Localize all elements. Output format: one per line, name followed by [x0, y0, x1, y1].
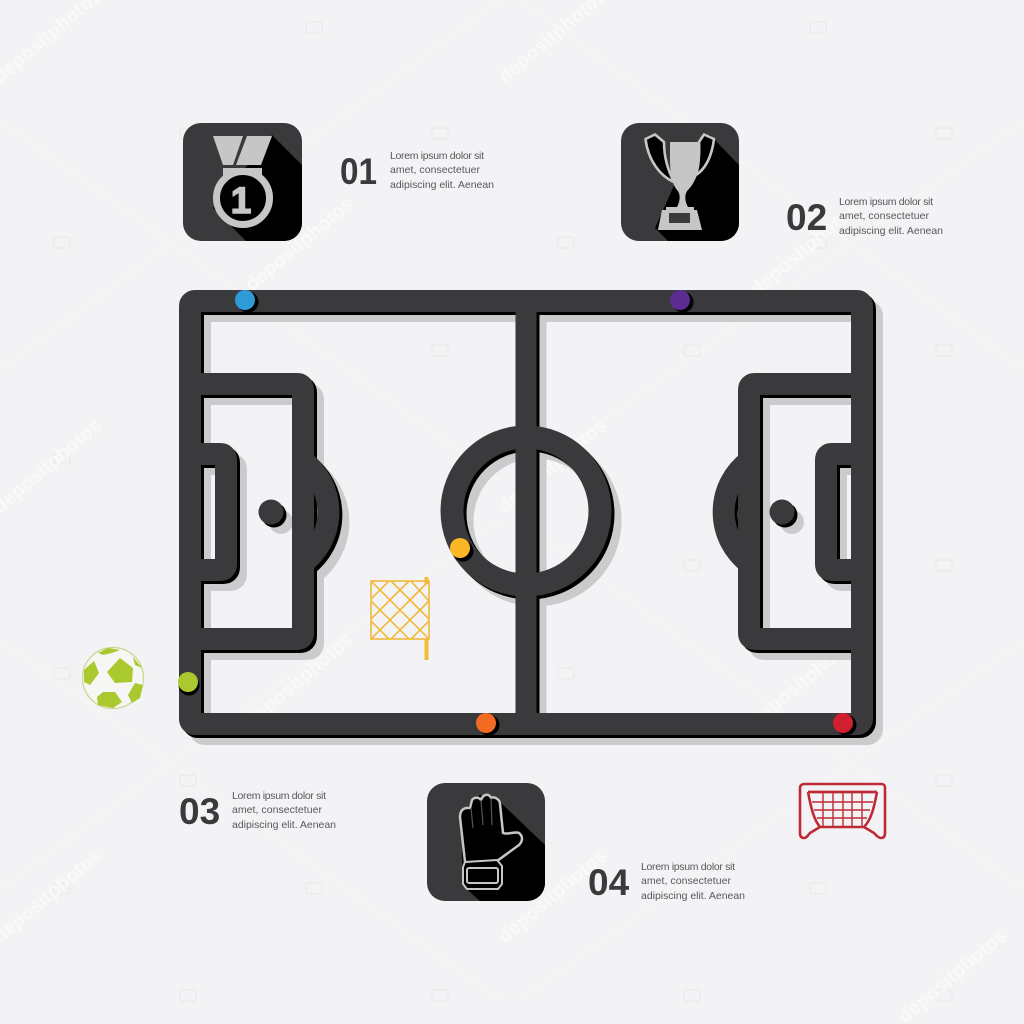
text block: item 02: adipiscing elit. Aenean	[839, 225, 943, 237]
panel: item 04 glove icon	[427, 783, 545, 901]
text block: item 02: Lorem ipsum dolor sit	[839, 196, 933, 208]
watermark: depositphotos	[746, 629, 863, 732]
text block: item 03: Lorem ipsum dolor sit	[232, 790, 326, 802]
heading: number 01: 01	[340, 151, 377, 192]
heading: number 04: 04	[588, 862, 630, 903]
panel: item 01 medal icon: 1	[231, 180, 251, 221]
text block: item 01: Lorem ipsum dolor sit	[390, 150, 484, 162]
watermark: depositphotos	[494, 845, 611, 948]
marker: purple dot	[670, 290, 694, 312]
panel: item 02 trophy icon	[621, 123, 739, 241]
marker: yellow dot	[450, 538, 474, 562]
icon: corner flag	[371, 577, 429, 660]
heading: number 02: 02	[786, 197, 827, 238]
marker: blue dot	[235, 290, 258, 312]
text block: item 04: amet, consectetuer	[641, 875, 732, 887]
text block: item 02: amet, consectetuer	[839, 210, 930, 222]
marker: green dot	[178, 672, 200, 696]
heading: number 03: 03	[179, 791, 220, 832]
watermark: depositphotos	[241, 629, 358, 732]
watermark: depositphotos	[494, 415, 611, 518]
text block: item 03: amet, consectetuer	[232, 804, 322, 816]
text block: item 01: amet, consectetuer	[390, 164, 480, 176]
text block: item 04: Lorem ipsum dolor sit	[641, 861, 735, 873]
text block: item 04: adipiscing elit. Aenean	[641, 890, 745, 902]
text block: item 01: adipiscing elit. Aenean	[390, 179, 494, 191]
marker: red dot	[833, 713, 856, 736]
icon: soccer ball	[82, 648, 144, 708]
text block: item 03: adipiscing elit. Aenean	[232, 819, 336, 831]
chart: football pitch	[190, 301, 872, 734]
watermark: depositphotos	[746, 198, 863, 301]
panel: item 01 medal icon	[183, 123, 302, 241]
watermark: depositphotos	[241, 193, 358, 296]
marker: orange dot	[476, 713, 500, 736]
icon: red goal	[800, 784, 885, 838]
